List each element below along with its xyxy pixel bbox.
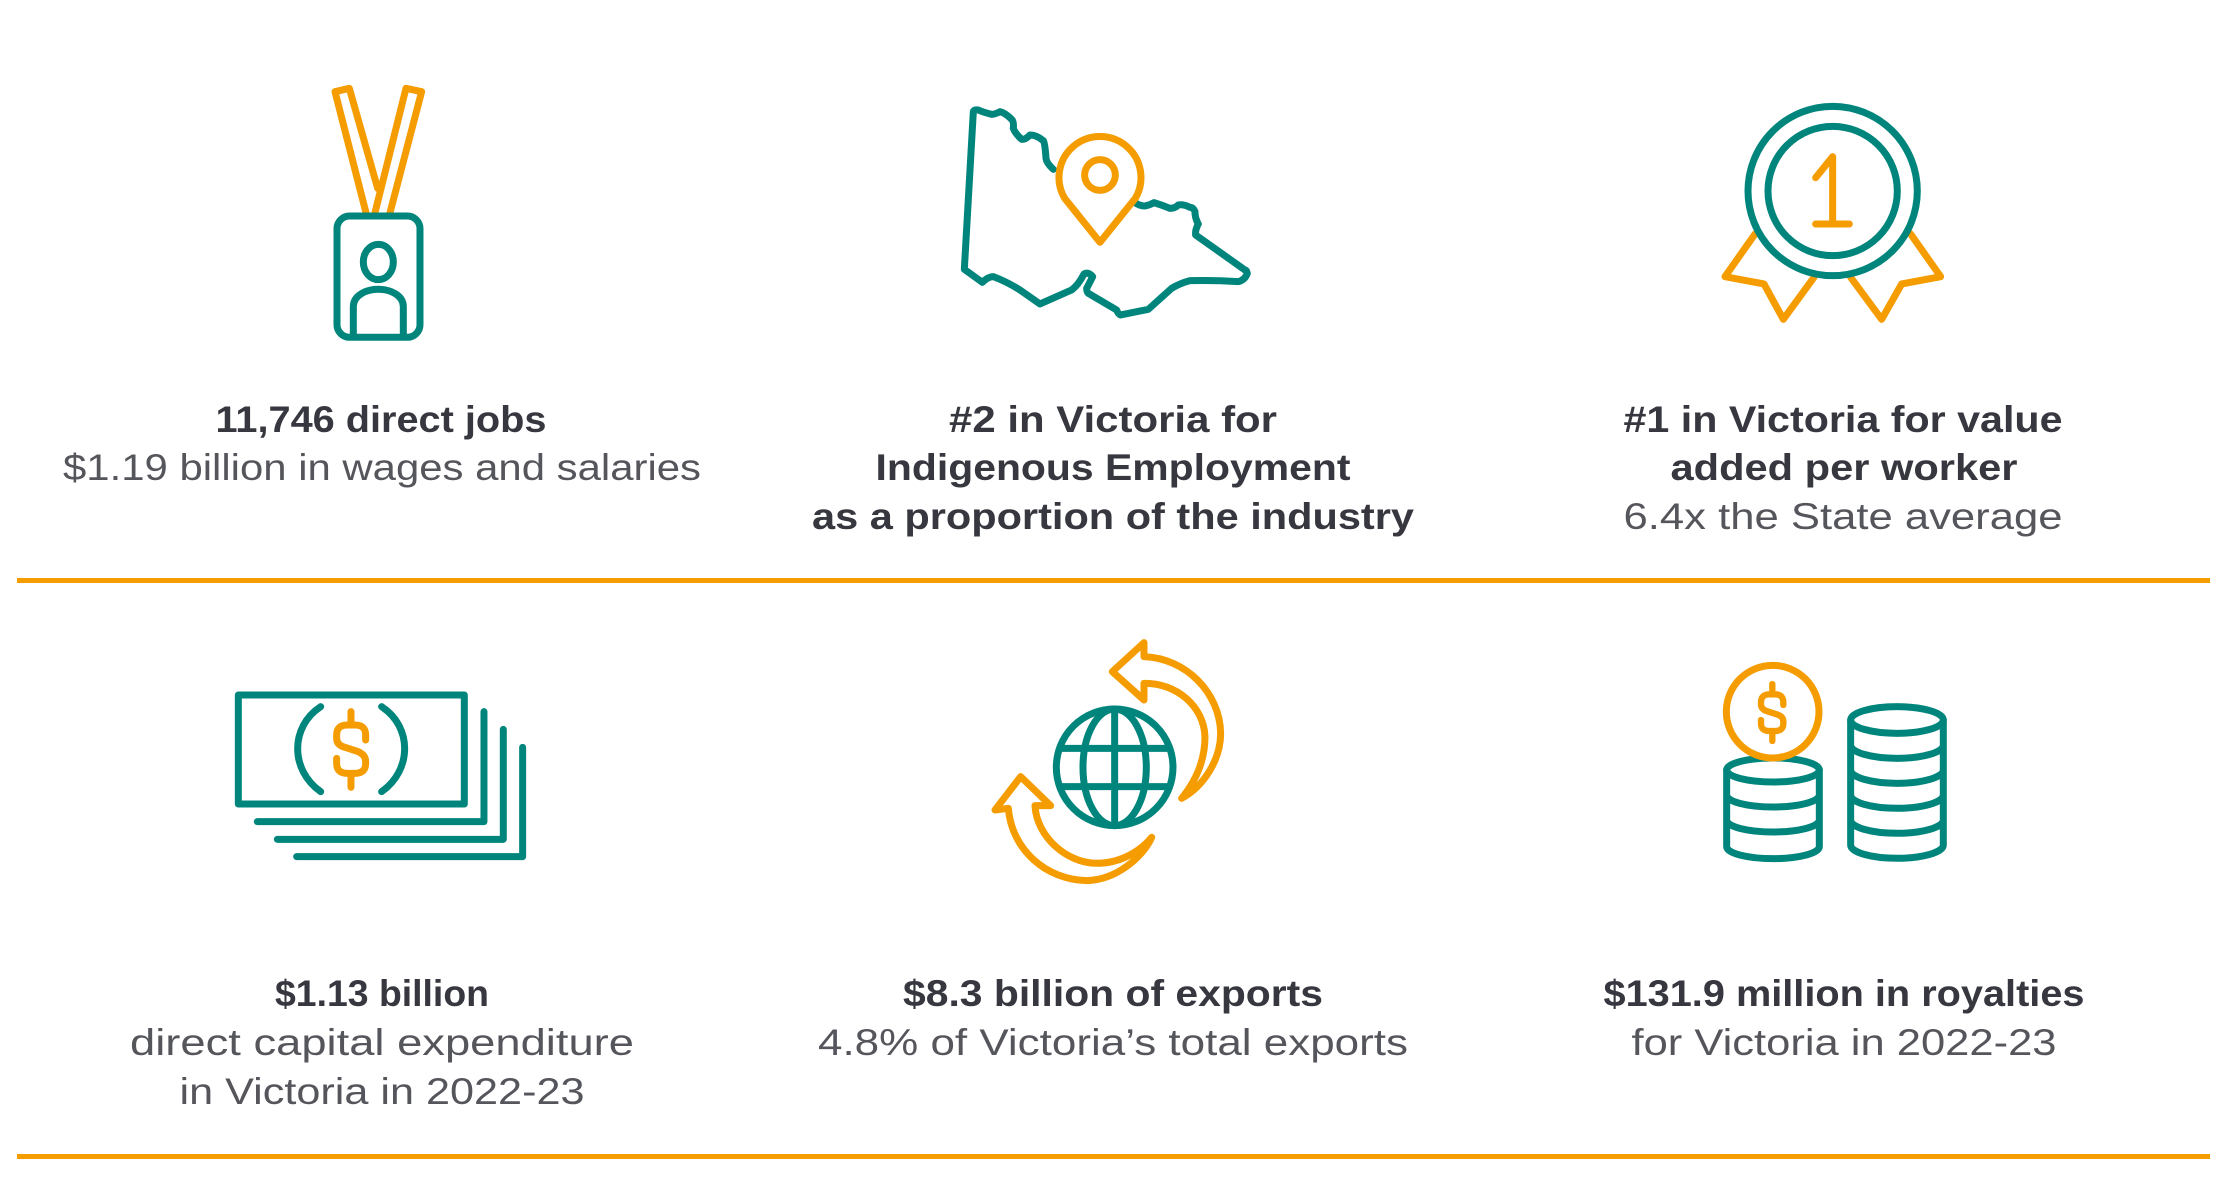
icon: globe with circular arrows xyxy=(995,643,1221,881)
text: direct jobs: $1.19 billion in wages and salaries xyxy=(63,447,701,488)
text: capital expenditure xyxy=(130,973,634,1112)
text: royalties xyxy=(1604,973,2084,1063)
text: royalties: for Victoria in 2022-23 xyxy=(1632,1022,2056,1063)
text: capital expenditure: direct capital expenditure xyxy=(130,1022,634,1063)
icon: Victoria map with pin xyxy=(964,110,1247,315)
text: royalties: $131.9 million in royalties xyxy=(1604,973,2084,1014)
icon: stack of banknotes xyxy=(238,695,523,857)
panel: exports xyxy=(818,643,1408,1063)
panel: capital expenditure xyxy=(130,695,634,1112)
text: value added per worker: 6.4x the State average xyxy=(1624,496,2062,537)
text: direct jobs xyxy=(63,399,701,488)
text: Indigenous employment: as a proportion of the industry xyxy=(812,496,1414,537)
panel: royalties xyxy=(1604,665,2084,1063)
text: value added per worker: #1 in Victoria for value xyxy=(1624,399,2062,440)
text: direct jobs: 11,746 direct jobs xyxy=(216,399,546,440)
icon: medal with number one xyxy=(1725,106,1941,319)
text: capital expenditure: $1.13 billion xyxy=(275,973,489,1014)
text: Indigenous employment: #2 in Victoria for xyxy=(949,399,1277,440)
text: Indigenous employment xyxy=(812,399,1414,537)
text: value added per worker: added per worker xyxy=(1670,447,2018,488)
text: Indigenous employment: Indigenous Employment xyxy=(876,447,1350,488)
panel: direct jobs xyxy=(63,88,701,488)
divider: upper orange rule xyxy=(17,578,2210,583)
text: exports: $8.3 billion of exports xyxy=(903,973,1323,1014)
icon: ID badge on lanyard xyxy=(335,88,422,337)
panel: value added per worker xyxy=(1624,106,2062,537)
text: value added per worker xyxy=(1624,399,2062,537)
text: capital expenditure: in Victoria in 2022-23 xyxy=(180,1071,584,1112)
text: exports: 4.8% of Victoria’s total exports xyxy=(818,1022,1408,1063)
icon: coin stacks xyxy=(1726,665,1943,859)
text: exports xyxy=(818,973,1408,1063)
divider: lower orange rule xyxy=(17,1154,2210,1159)
panel: Indigenous employment xyxy=(812,110,1414,537)
